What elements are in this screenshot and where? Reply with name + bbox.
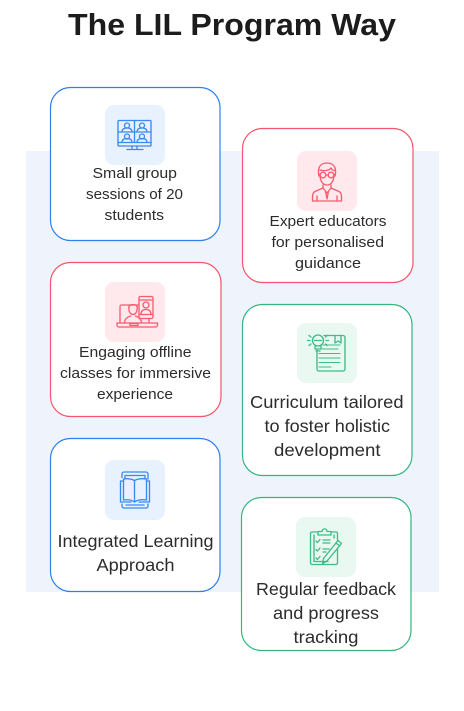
icon: online class laptop and phone bbox=[105, 282, 165, 342]
text: small group: students bbox=[104, 207, 164, 224]
card: regular feedback bbox=[242, 498, 411, 650]
text: curriculum: development bbox=[274, 440, 381, 460]
card: curriculum bbox=[242, 304, 412, 476]
text: regular feedback bbox=[256, 579, 396, 647]
text: engaging offline: experience bbox=[97, 386, 173, 403]
text: curriculum: to foster holistic bbox=[264, 416, 390, 436]
text: engaging offline: Engaging offline bbox=[79, 344, 192, 361]
icon: book on tablet bbox=[105, 460, 165, 520]
text: curriculum: Curriculum tailored bbox=[250, 392, 404, 412]
text: curriculum bbox=[250, 392, 404, 460]
icon: video call monitor bbox=[105, 105, 165, 165]
card: engaging offline classes bbox=[50, 262, 221, 416]
title: The LIL Program Way bbox=[68, 7, 397, 42]
text: regular feedback: tracking bbox=[294, 627, 358, 647]
icon: document with light bulb bbox=[297, 323, 357, 383]
text: small group bbox=[86, 165, 183, 224]
icon: clipboard with pencil bbox=[296, 517, 356, 577]
text: engaging offline bbox=[60, 344, 211, 403]
icon: educator with glasses bbox=[297, 151, 357, 211]
text: integrated learning: Integrated Learning bbox=[58, 531, 214, 551]
text: expert educators: Expert educators bbox=[270, 213, 387, 230]
text: integrated learning bbox=[58, 531, 214, 575]
text: regular feedback: and progress bbox=[273, 603, 379, 623]
text: small group: Small group bbox=[92, 165, 177, 182]
card: expert educators bbox=[242, 128, 413, 282]
text: expert educators: guidance bbox=[295, 255, 361, 272]
text: small group: sessions of 20 bbox=[86, 186, 183, 203]
text: regular feedback: Regular feedback bbox=[256, 579, 396, 599]
text: expert educators bbox=[270, 213, 387, 272]
card: integrated learning bbox=[50, 438, 220, 592]
text: integrated learning: Approach bbox=[96, 555, 174, 575]
card: small group sessions bbox=[50, 88, 220, 240]
text: engaging offline: classes for immersive bbox=[60, 365, 211, 382]
background panel bbox=[26, 151, 439, 592]
text: expert educators: for personalised bbox=[272, 234, 384, 251]
